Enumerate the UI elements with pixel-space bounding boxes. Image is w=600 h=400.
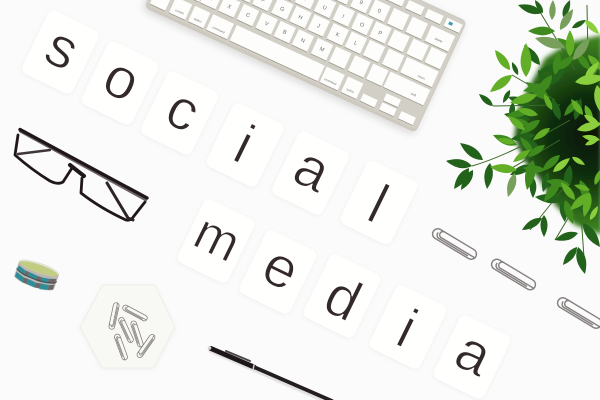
keyboard	[144, 0, 467, 133]
letter card: m: m	[185, 203, 249, 274]
letter card: i	[367, 283, 449, 371]
keyboard: delete	[434, 37, 443, 44]
paperclips on tray	[108, 302, 156, 361]
letter card: l	[338, 159, 420, 246]
icon: white hexagon tray	[80, 285, 175, 368]
keyboard: command	[212, 25, 226, 35]
letter card: a: a	[445, 318, 502, 389]
keyboard: option	[193, 17, 203, 24]
plant	[445, 0, 600, 275]
letter card: i: i	[224, 113, 264, 176]
icon: paperclip	[431, 227, 478, 261]
icon: paperclip	[490, 257, 537, 292]
mid green leaves	[491, 27, 600, 225]
letter card: a	[270, 128, 351, 217]
letter card: e	[237, 226, 319, 316]
letter card: l: l	[358, 173, 398, 236]
icon: pen	[208, 346, 332, 400]
light highlight leaves	[551, 18, 600, 221]
keyboard: control	[175, 8, 185, 16]
keyboard: command	[323, 77, 337, 86]
icon: paperclip	[556, 296, 600, 330]
letter card: i: i	[387, 297, 427, 360]
letter card: s	[20, 7, 101, 96]
letter card: m	[175, 197, 257, 285]
letter card: s: s	[35, 13, 89, 83]
letter card: e: e	[253, 232, 309, 304]
icon: eyeglasses	[15, 130, 147, 220]
letter card: c	[139, 68, 220, 157]
bright leaves	[487, 30, 600, 218]
keyboard: shift	[410, 92, 417, 98]
letter card: o	[79, 38, 161, 127]
letter card: a	[431, 312, 513, 400]
dark leaves	[445, 0, 600, 275]
letter card: d: d	[315, 263, 371, 334]
grey-green leaves	[504, 0, 594, 198]
letter card: a: a	[284, 134, 341, 205]
dark foliage mass	[514, 35, 600, 235]
keyboard: return	[417, 74, 426, 81]
stems	[472, 5, 588, 272]
icon: washi tape roll	[13, 256, 61, 294]
letter card: d	[301, 252, 383, 340]
letter card: o: o	[93, 44, 150, 115]
letter card: i	[204, 101, 286, 189]
letter card: c: c	[156, 75, 210, 145]
keyboard: option	[346, 87, 355, 94]
